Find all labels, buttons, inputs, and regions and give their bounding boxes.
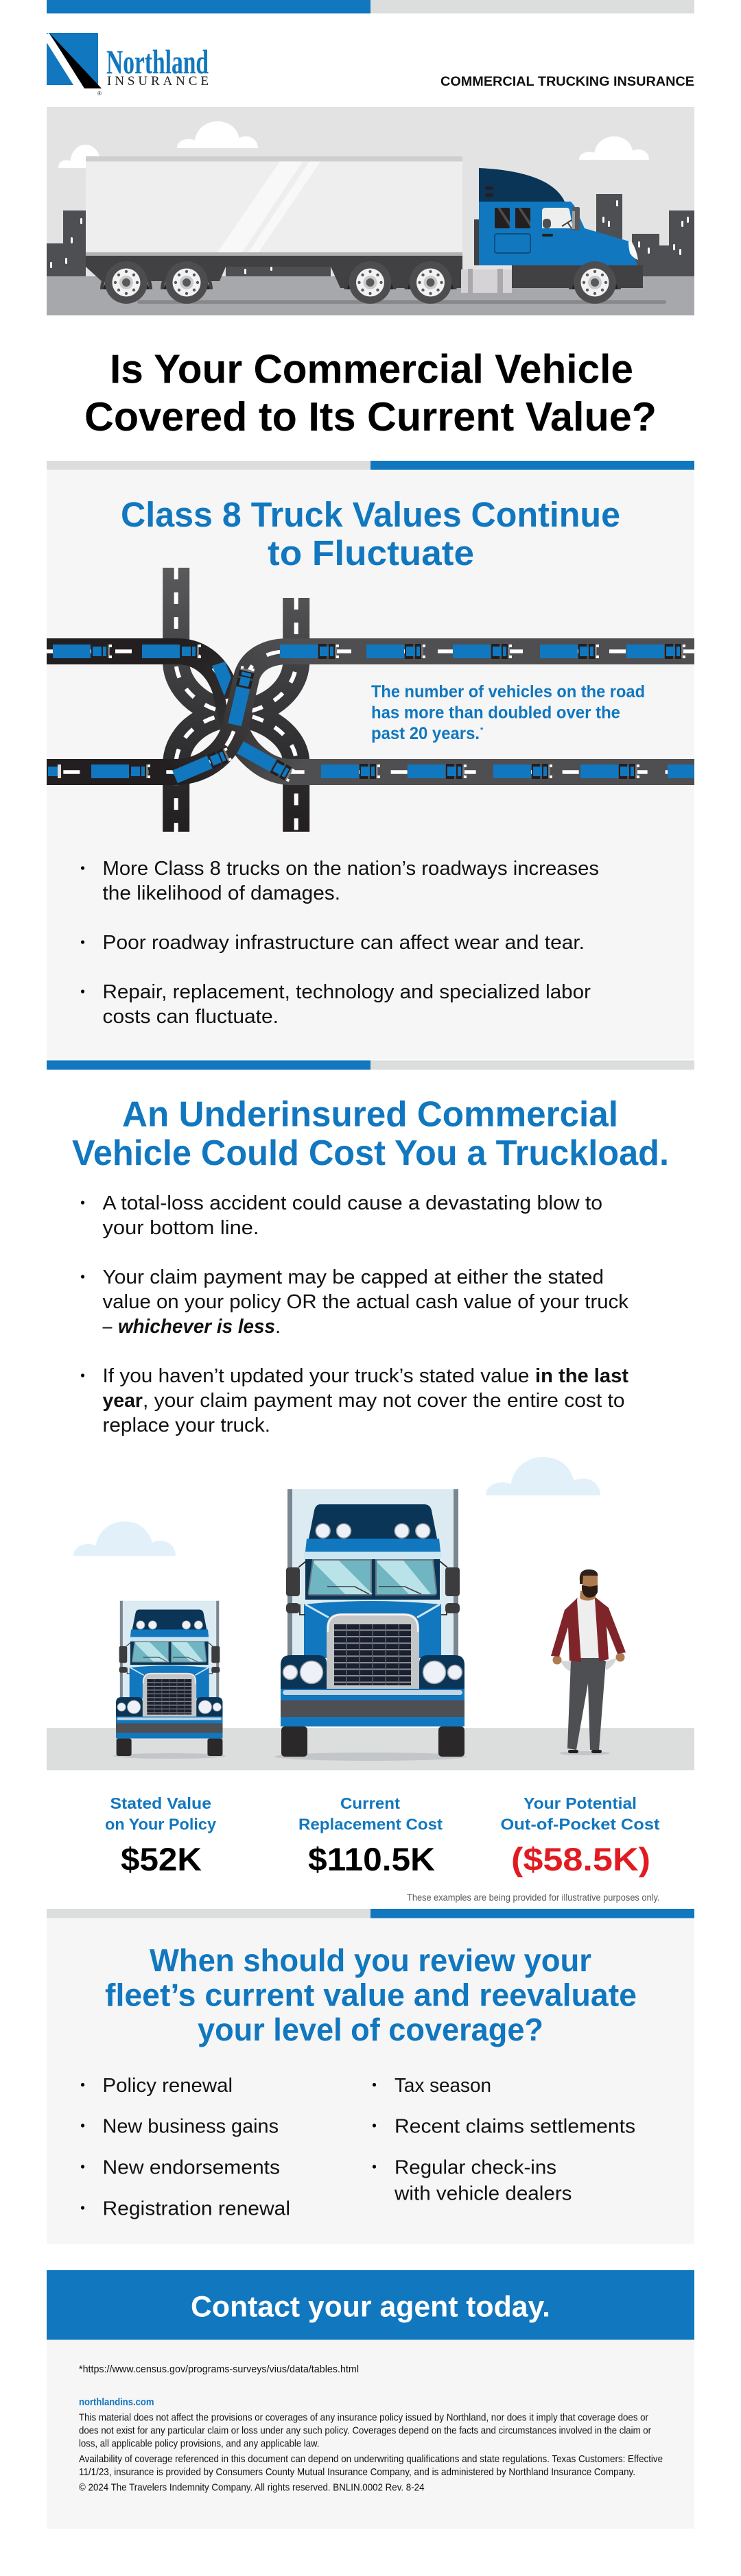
logo: Northland Insurance (47, 33, 209, 97)
callout: vehicles doubled: * (480, 726, 484, 734)
trailer (86, 156, 462, 256)
vertical roads (176, 568, 296, 832)
stated value: Stated Value (110, 1794, 211, 1812)
bullet list: costs can fluctuate. (103, 1006, 279, 1028)
panel: when to review (47, 1909, 694, 2243)
road (47, 276, 694, 315)
bullet list (81, 858, 599, 1028)
bullet list left: Registration renewal (103, 2198, 290, 2220)
bullet list: the likelihood of damages. (103, 882, 340, 904)
callout: vehicles doubled: has more than doubled over the (371, 703, 620, 723)
main title: Covered to Its Current Value? (84, 394, 657, 440)
bullet list right: with vehicle dealers (394, 2183, 572, 2205)
stated value (105, 1794, 216, 1877)
bullet list: year (103, 1390, 143, 1412)
legal text (79, 2412, 663, 2493)
heading: when to review (105, 1942, 637, 2047)
bullet list right: Tax season (395, 2075, 491, 2097)
logo: Northland Insurance: INSURANCE (107, 74, 209, 88)
logo: Northland Insurance: ® (97, 91, 102, 97)
replacement cost: $110.5K (308, 1841, 435, 1877)
out of pocket (501, 1794, 660, 1877)
bullet list right: Regular check-ins (395, 2157, 556, 2179)
heading: underinsured: Vehicle Could Cost You a Truckload. (72, 1133, 669, 1173)
legal text: 11/1/23, insurance is provided by Consumers County Mutual Insurance Company, and is administered by Northland Insurance Company. (79, 2467, 635, 2478)
bullet list: whichever is less (118, 1316, 275, 1338)
replacement cost: Replacement Cost (298, 1816, 443, 1833)
legal text: loss, all applicable policy provisions, and any applicable law. (79, 2438, 320, 2449)
replacement cost: Current (340, 1794, 400, 1812)
bullet list left: Policy renewal (103, 2075, 233, 2097)
heading: when to review: fleet’s current value and reevaluate (105, 1977, 637, 2013)
bullet list: Repair, replacement, technology and specialized labor (103, 981, 591, 1003)
bullet list: , your claim payment may not cover the entire cost to (143, 1390, 624, 1412)
contact banner (47, 2270, 694, 2339)
value columns (105, 1794, 660, 1877)
heading: when to review: your level of coverage? (198, 2012, 543, 2047)
bullet list: Poor roadway infrastructure can affect wear and tear. (103, 932, 585, 954)
out of pocket: Out-of-Pocket Cost (501, 1816, 660, 1833)
bullet list left: New endorsements (103, 2157, 280, 2179)
fuel tank (461, 269, 512, 293)
icon: man with empty pockets (551, 1569, 626, 1753)
illustrative note: These examples are being provided for illustrative purposes only. (407, 1892, 660, 1903)
roads interchange chart with trucks (47, 568, 694, 832)
icon: large truck, replacement cost (281, 1489, 464, 1757)
road: top left to bottom right (47, 651, 694, 772)
clouds (58, 121, 649, 168)
panel: truck values fluctuate (47, 461, 694, 1059)
footnote link: *https://www.census.gov/programs-surveys/vius/data/tables.html (79, 2364, 359, 2375)
replacement cost (298, 1794, 443, 1877)
heading: class 8 values: to Fluctuate (268, 533, 474, 573)
top colour bar (47, 0, 694, 14)
bullet list: your bottom line. (103, 1217, 259, 1239)
callout: vehicles doubled: past 20 years. (371, 724, 480, 743)
legal text: Availability of coverage referenced in this document can depend on underwriting qualifications and state regulations. Texas Customers: Effective (79, 2454, 663, 2465)
legal text: © 2024 The Travelers Indemnity Company. All rights reserved. BNLIN.0002 Rev. 8-24 (79, 2482, 424, 2493)
bullet list: in the last (535, 1365, 628, 1387)
bullet list right: Recent claims settlements (395, 2116, 635, 2138)
logo: Northland Insurance: Northland (106, 43, 209, 81)
bullet list (81, 1192, 629, 1436)
road: top right to bottom left (47, 651, 694, 772)
icon: small truck, stated value (116, 1601, 222, 1756)
bullet list: – (103, 1316, 113, 1338)
stated value: $52K (121, 1841, 202, 1877)
out of pocket: Your Potential (524, 1794, 637, 1812)
heading: class 8 values (121, 495, 620, 573)
stated value: on Your Policy (105, 1816, 216, 1833)
clouds over truck comparison (73, 1457, 600, 1556)
tagline: COMMERCIAL TRUCKING INSURANCE (440, 74, 694, 89)
callout: vehicles doubled (371, 682, 645, 743)
bullet list: value on your policy OR the actual cash value of your truck (103, 1291, 629, 1313)
main title: Is Your Commercial Vehicle (110, 347, 633, 392)
heading: underinsured: An Underinsured Commercial (122, 1094, 618, 1134)
bullet list: A total-loss accident could cause a devastating blow to (103, 1192, 602, 1214)
legal text: This material does not affect the provisions or coverages of any insurance policy issued by Northland, nor does it imply that coverage does or (79, 2412, 648, 2423)
heading: underinsured (72, 1094, 669, 1173)
contact banner: Contact your agent today. (191, 2290, 550, 2323)
ground band (47, 1728, 694, 1770)
out of pocket: ($58.5K) (511, 1841, 650, 1877)
bullet list: If you haven’t updated your truck’s stated value (103, 1365, 530, 1387)
bullet list: replace your truck. (103, 1415, 270, 1436)
footer panel (47, 2339, 694, 2529)
panel: underinsured vehicle (47, 1060, 694, 1436)
heading: when to review: When should you review your (150, 1942, 591, 1978)
hero illustration: truck on road (47, 107, 694, 315)
city skyline (47, 194, 694, 280)
bullet list right (373, 2075, 635, 2205)
bullet list left: New business gains (103, 2116, 279, 2138)
main title (84, 347, 657, 440)
website: northlandins.com (79, 2397, 154, 2408)
bullet list: Your claim payment may be capped at either the stated (103, 1266, 604, 1288)
bullet list: More Class 8 trucks on the nation’s roadways increases (103, 858, 599, 880)
bullet list left (81, 2075, 290, 2220)
bullet list: . (275, 1316, 281, 1338)
heading: class 8 values: Class 8 Truck Values Continue (121, 495, 620, 534)
truck shadows (113, 1751, 610, 1761)
tractor cab (474, 219, 479, 265)
trucks on road (47, 644, 694, 784)
callout: vehicles doubled: The number of vehicles on the road (371, 682, 645, 701)
wheels (100, 261, 621, 304)
legal text: does not exist for any particular claim or loss under any such policy. Coverages depend on the facts and circumstances involved in the claim or (79, 2426, 651, 2437)
